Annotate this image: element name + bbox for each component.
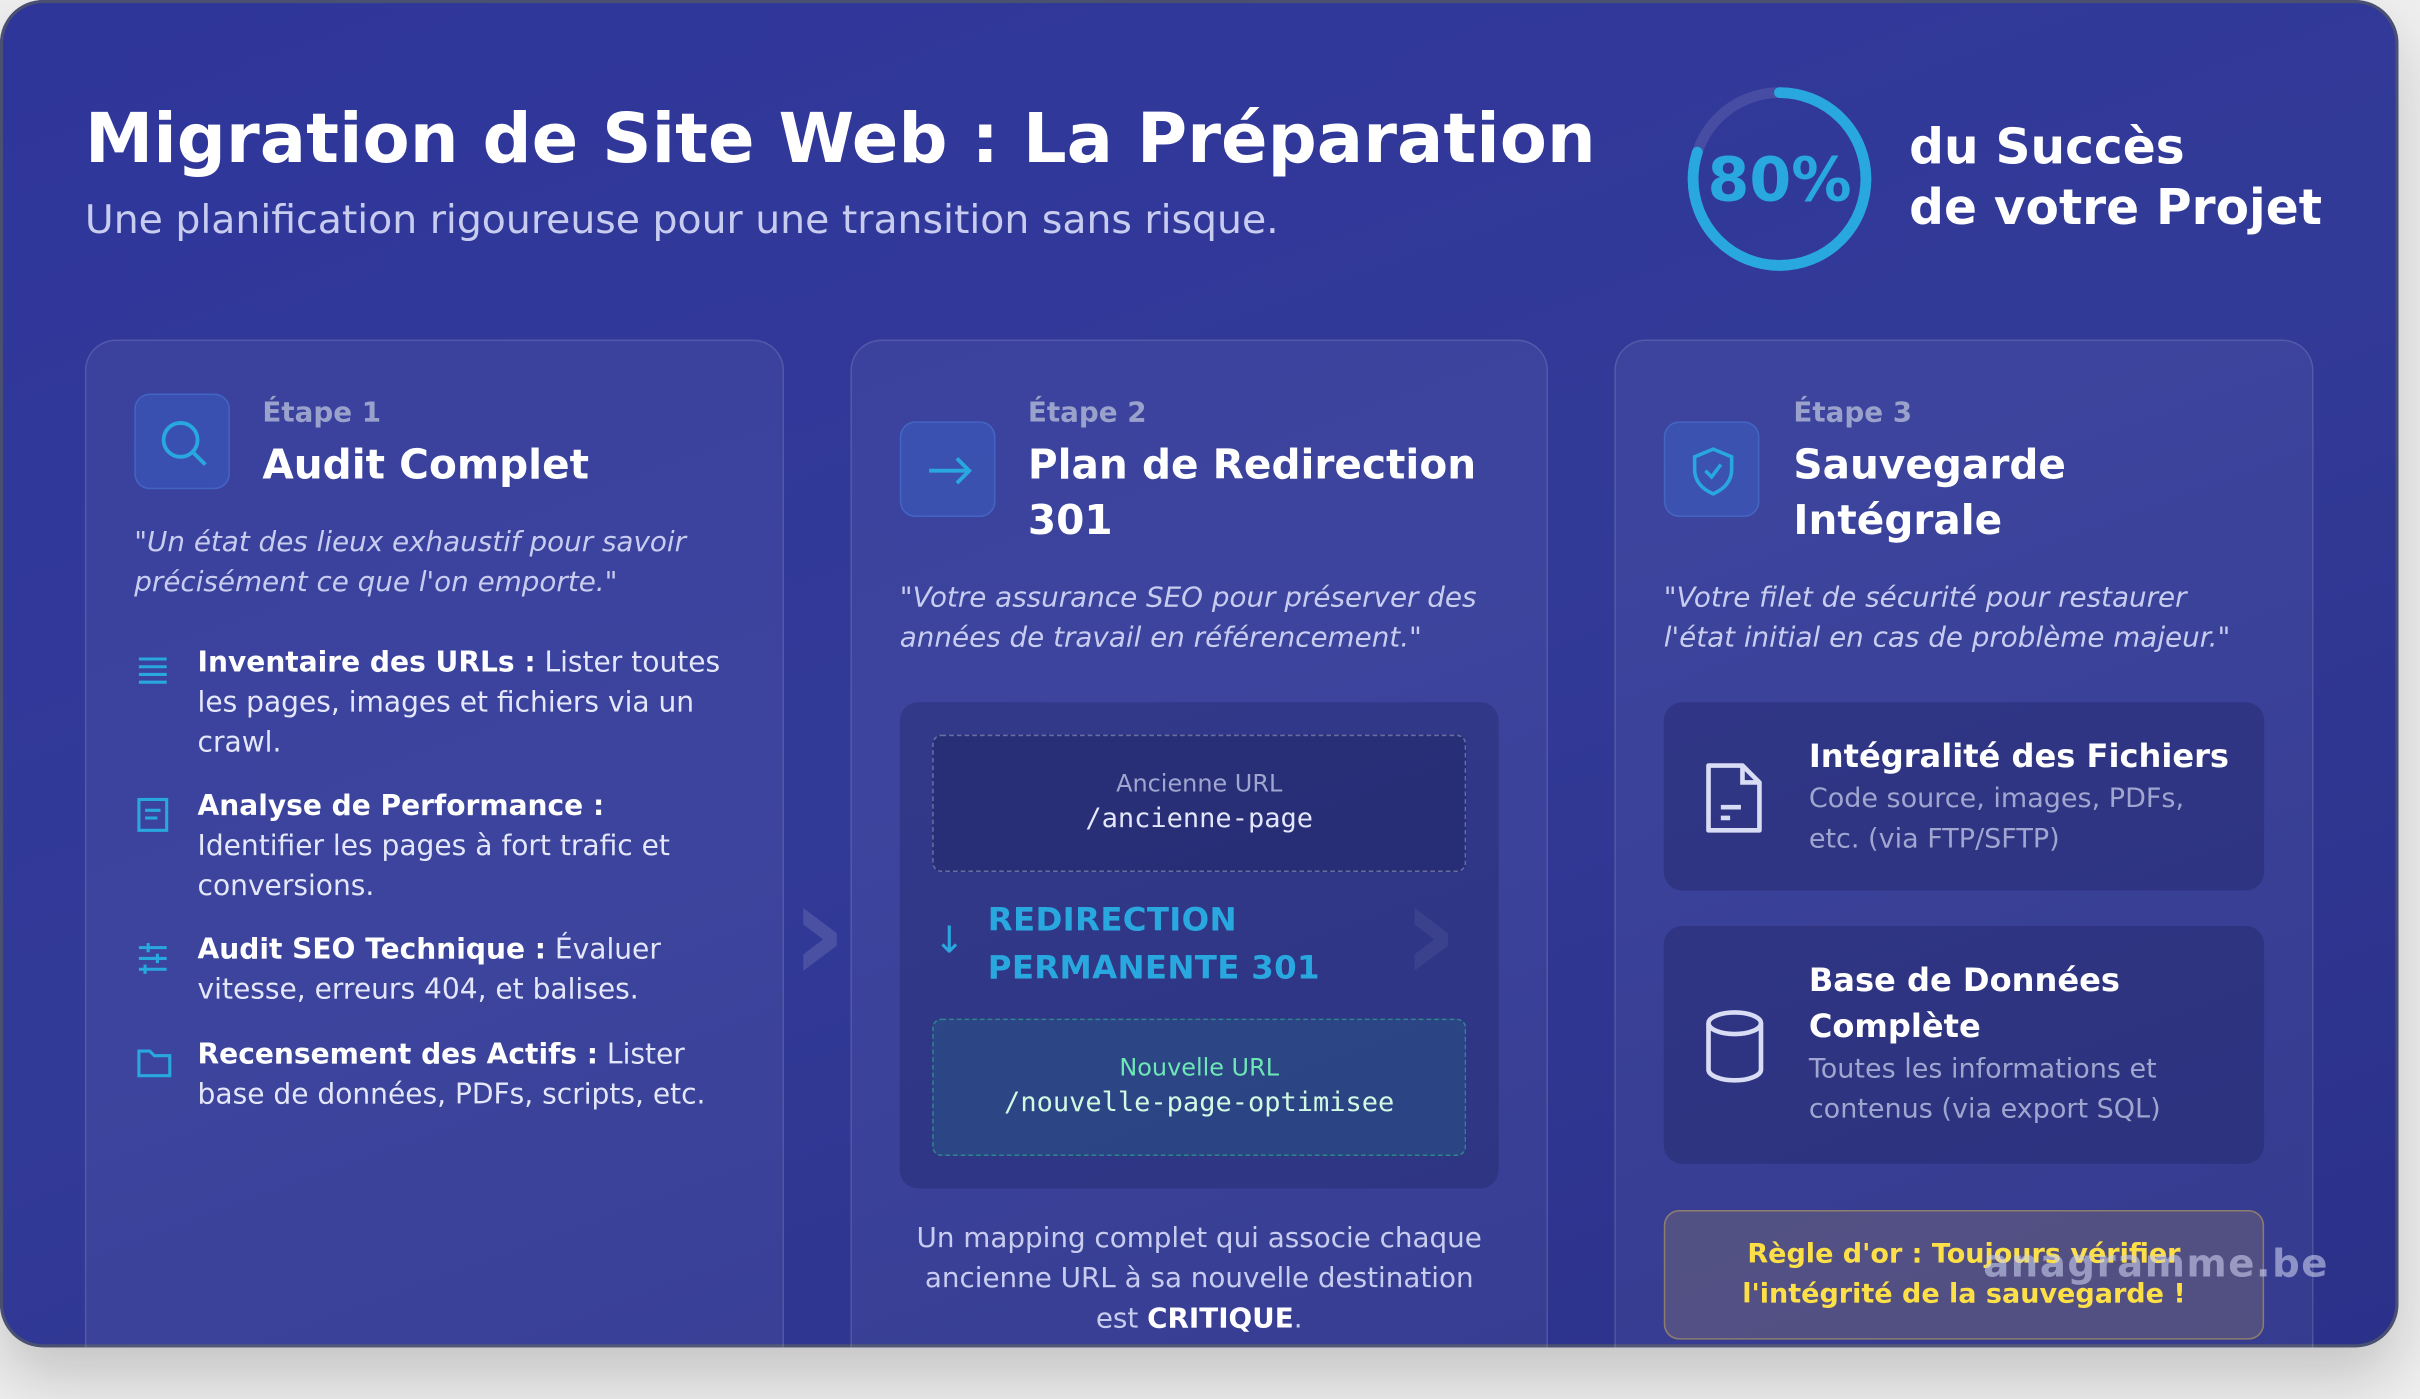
bullet icon 4 [137, 1050, 172, 1078]
bullet icon 3 [138, 943, 167, 974]
old url box: /ancienne-page [1085, 804, 1313, 835]
success caption: de votre Projet [1909, 181, 2322, 236]
icon: search [134, 394, 230, 489]
redirect diagram [900, 702, 1499, 1188]
icon: database [1706, 1010, 1764, 1083]
step 2 heading: 301 [1028, 499, 1113, 545]
step 3 heading [1793, 443, 2066, 545]
old url box [932, 735, 1466, 872]
files block: etc. (via FTP/SFTP) [1809, 824, 2060, 855]
chevron 2: › [1401, 852, 1459, 1014]
step 3 heading: Sauvegarde [1793, 443, 2066, 489]
redirect label: REDIRECTION [988, 901, 1237, 938]
database block: Complète [1809, 1008, 1981, 1045]
success caption: du Succès [1909, 120, 2185, 176]
old url box: Ancienne URL [1116, 770, 1282, 798]
step 2 label: Étape 2 [1028, 397, 1147, 429]
golden rule callout: Règle d'or : Toujours vérifier [1747, 1239, 2181, 1270]
step 2 heading [1028, 443, 1476, 545]
golden rule callout [1664, 1210, 2264, 1340]
progress ring 80%: 80% [1707, 146, 1852, 216]
down arrow: ↓ [934, 918, 965, 962]
bullet icon 2 [137, 798, 168, 832]
files block [1664, 702, 2264, 891]
bullet 2: Analyse de Performance : Identifier les pages à fort trafic et conversions. [198, 790, 670, 903]
step 1 quote: précisément ce que l'on emporte." [134, 566, 617, 599]
progress ring 80% [1688, 87, 1872, 271]
step 1 quote [134, 526, 688, 599]
bullet icon 1 [138, 658, 167, 684]
step 1 label: Étape 1 [262, 397, 381, 429]
bullet 1: Inventaire des URLs : Lister toutes les pages, images et fichiers via un crawl. [198, 647, 720, 759]
step 2 quote [900, 582, 1476, 654]
bullet 3: Audit SEO Technique : Évaluer vitesse, erreurs 404, et balises. [198, 934, 661, 1006]
step 1 quote: "Un état des lieux exhaustif pour savoir [134, 526, 686, 559]
redirect label [988, 901, 1320, 986]
database block: Base de Données [1809, 962, 2120, 999]
step 3 quote [1664, 582, 2230, 654]
step 3 label: Étape 3 [1793, 397, 1912, 429]
new url box: Nouvelle URL [1119, 1054, 1279, 1082]
chevron 1: › [790, 852, 847, 1014]
files block: Code source, images, PDFs, [1809, 784, 2184, 815]
panel: step 2 [850, 340, 1548, 1399]
files block: Intégralité des Fichiers [1809, 738, 2229, 775]
step 3 heading: Intégrale [1793, 499, 2002, 545]
new url box [932, 1019, 1466, 1156]
subtitle: Une planification rigoureuse pour une transition sans risque. [85, 198, 1279, 244]
step 1 heading: Audit Complet [262, 443, 589, 489]
step 2 quote: "Votre assurance SEO pour préserver des [900, 582, 1476, 614]
icon: shield [1664, 421, 1759, 517]
database block: Toutes les informations et [1809, 1054, 2157, 1085]
database block: contenus (via export SQL) [1809, 1094, 2161, 1125]
step 3 quote: l'état initial en cas de problème majeur." [1664, 622, 2230, 654]
watermark: anagramme.be [1983, 1241, 2329, 1286]
new url box: /nouvelle-page-optimisee [1004, 1088, 1394, 1119]
panel: step 1 [85, 340, 784, 1399]
icon: redirect arrow [900, 421, 995, 517]
redirect label: PERMANENTE 301 [988, 949, 1320, 986]
success caption [1909, 120, 2322, 236]
golden rule callout: l'intégrité de la sauvegarde ! [1742, 1279, 2186, 1310]
database block [1664, 926, 2264, 1164]
mapping note: Un mapping complet qui associe chaque ancienne URL à sa nouvelle destination est CRITIQUE. [917, 1222, 1482, 1335]
step 3 quote: "Votre filet de sécurité pour restaurer [1664, 582, 2187, 614]
panel: step 3 [1614, 340, 2314, 1399]
step 2 quote: années de travail en référencement." [900, 622, 1422, 654]
bullet 4: Recensement des Actifs : Lister base de données, PDFs, scripts, etc. [198, 1039, 705, 1111]
step 2 heading: Plan de Redirection [1028, 443, 1476, 489]
title: Migration de Site Web : La Préparation [85, 100, 1596, 179]
icon: file [1706, 763, 1762, 833]
